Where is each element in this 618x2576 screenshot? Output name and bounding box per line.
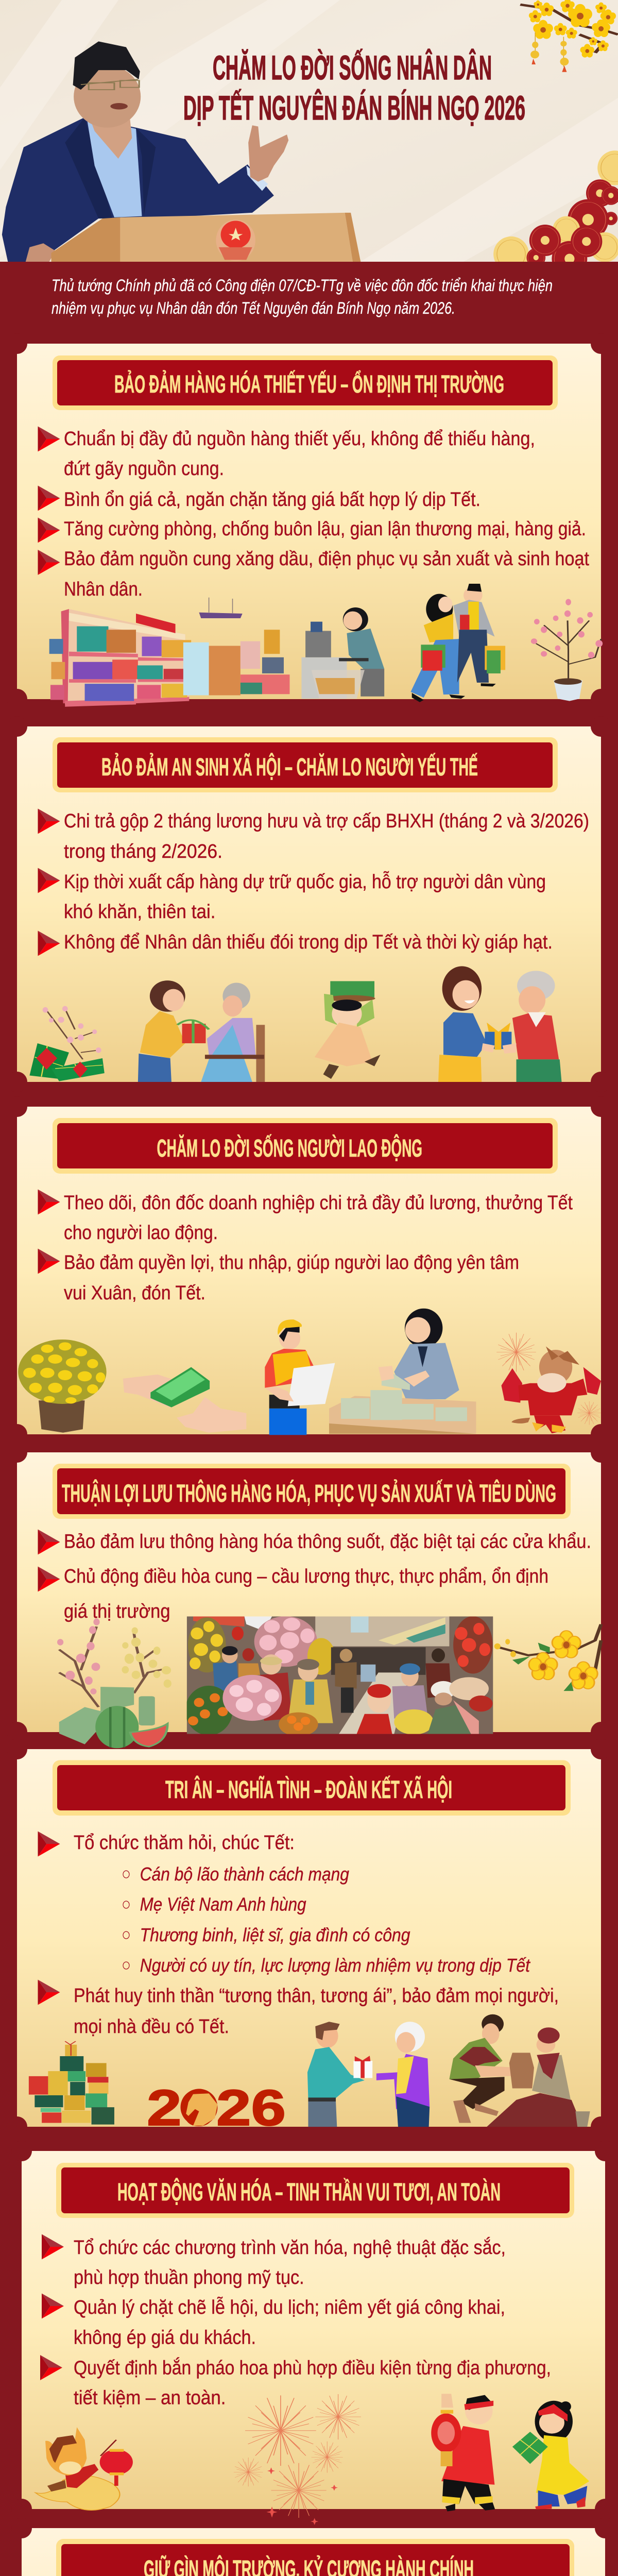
sub-list: groups visited: Cán bộ lão thành cách mạng	[140, 1863, 349, 1885]
illustration: accountant with cash stacks	[329, 1309, 476, 1434]
heading	[56, 2163, 574, 2218]
panel: gratitude	[7, 1739, 611, 2137]
illustration: shopping couple	[410, 584, 505, 702]
bullet list: Không để Nhân dân thiếu đói trong dịp Tết và thời kỳ giáp hạt.	[64, 931, 553, 953]
sub-list: groups visited: Người có uy tín, lực lượng làm nhiệm vụ trong dịp Tết	[140, 1955, 531, 1976]
intro text: nhiệm vụ phục vụ Nhân dân đón Tết Nguyên đán Bính Ngọ năm 2026.	[52, 299, 455, 317]
illustration: worker with blueprint	[265, 1319, 335, 1435]
illustration: woman giving gift to seated elder	[138, 980, 265, 1082]
illustration: children with lantern and banh chung	[431, 2394, 589, 2512]
illustration: hands exchanging money	[123, 1367, 246, 1433]
bullet list: Quản lý chặt chẽ lễ hội, du lịch; niêm yết giá công khai,	[74, 2296, 505, 2318]
illustration: apricot pot	[18, 1340, 107, 1433]
bullet list: Kịp thời xuất cấp hàng dự trữ quốc gia, hỗ trợ người dân vùng	[64, 871, 546, 893]
bullet list: Bình ổn giá cả, ngăn chặn tăng giá bất hợp lý dịp Tết.	[64, 489, 480, 511]
bullet list	[38, 809, 589, 956]
illustration: fireworks	[234, 2394, 361, 2525]
bullet list	[38, 427, 589, 600]
illustration: peach tree	[531, 599, 603, 701]
heading	[53, 737, 558, 792]
panel: social security	[7, 716, 611, 1092]
illustration: child carrying banh chung	[315, 981, 381, 1079]
illustration: gift stack	[29, 2041, 114, 2125]
bullet list: vui Xuân, đón Tết.	[64, 1282, 205, 1304]
illustration: apricot branch	[494, 1624, 601, 1691]
heading	[53, 1464, 571, 1519]
bullet list: Tổ chức các chương trình văn hóa, nghệ thuật đặc sắc,	[74, 2236, 506, 2259]
bullet list: đứt gãy nguồn cung.	[64, 458, 224, 480]
panel: essential goods	[7, 333, 611, 709]
photo: prime minister at podium	[2, 41, 360, 262]
illustration: man giving gift to elderly woman	[307, 2022, 430, 2127]
bullet list: Nhân dân.	[64, 579, 143, 600]
bullet list	[38, 1189, 573, 1304]
sub-list: groups visited: Mẹ Việt Nam Anh hùng	[140, 1894, 306, 1914]
heading	[56, 2539, 574, 2576]
bullet list	[40, 2234, 551, 2409]
bullet list: tiết kiệm – an toàn.	[74, 2387, 226, 2409]
bullet list	[38, 1529, 591, 1622]
icon: decorative paper fans	[493, 150, 618, 277]
bullet list: phù hợp thuần phong mỹ tục.	[74, 2267, 304, 2289]
icon: apricot blossom branch	[520, 0, 618, 72]
bullet list: trong tháng 2/2026.	[64, 841, 222, 862]
bullet list	[38, 1831, 559, 2038]
illustration: horse with lantern on cloud	[36, 2427, 133, 2510]
bullet list: Bảo đảm quyền lợi, thu nhập, giúp người lao động yên tâm	[64, 1252, 519, 1274]
bullet list: Phát huy tinh thần “tương thân, tương ái”, bảo đảm mọi người,	[74, 1985, 559, 2007]
intro text	[52, 276, 553, 317]
illustration: supermarket shelves	[49, 598, 289, 707]
panel: workers	[7, 1096, 611, 1445]
illustration: woman giving gift to elder	[438, 966, 562, 1082]
illustration: 2026 with horse: 2026	[147, 2079, 286, 2136]
illustration: blossoms, banh chung and watermelon	[57, 1618, 171, 1748]
panel: goods circulation	[7, 1442, 611, 1748]
panel: culture	[11, 2141, 615, 2525]
illustration: shopper at checkout	[301, 607, 384, 699]
sub-list: groups visited: Thương binh, liệt sĩ, gia đình có công	[140, 1924, 410, 1945]
bullet list: Chuẩn bị đầy đủ nguồn hàng thiết yếu, không để thiếu hàng,	[64, 428, 535, 450]
bullet list: giá thị trường	[64, 1601, 170, 1622]
bullet list: cho người lao động.	[64, 1222, 218, 1244]
illustration: banh chung and blossom	[29, 1006, 105, 1081]
bullet list: mọi nhà đều có Tết.	[74, 2016, 229, 2038]
illustration: Tet flower market painting	[185, 1616, 493, 1736]
bullet list: không ép giá du khách.	[74, 2327, 256, 2348]
illustration: volunteer helping person in need	[449, 2014, 590, 2127]
bullet list: Quyết định bắn pháo hoa phù hợp điều kiện từng địa phương,	[74, 2357, 551, 2379]
bullet list: khó khăn, thiên tai.	[64, 901, 215, 923]
bullet list: Tổ chức thăm hỏi, chúc Tết:	[74, 1832, 295, 1854]
bullet list: Chủ động điều hòa cung – cầu lương thực, thực phẩm, ổn định	[64, 1566, 548, 1587]
header	[0, 0, 618, 277]
sub-list: groups visited	[123, 1863, 531, 1976]
heading	[53, 355, 558, 410]
title	[183, 48, 525, 127]
panel: environment and discipline	[11, 2518, 615, 2576]
heading	[53, 1118, 558, 1174]
illustration: horse mascot with envelopes	[496, 1333, 601, 1433]
heading	[53, 1760, 571, 1816]
bullet list: Theo dõi, đôn đốc doanh nghiệp chi trả đầy đủ lương, thưởng Tết	[64, 1192, 573, 1214]
